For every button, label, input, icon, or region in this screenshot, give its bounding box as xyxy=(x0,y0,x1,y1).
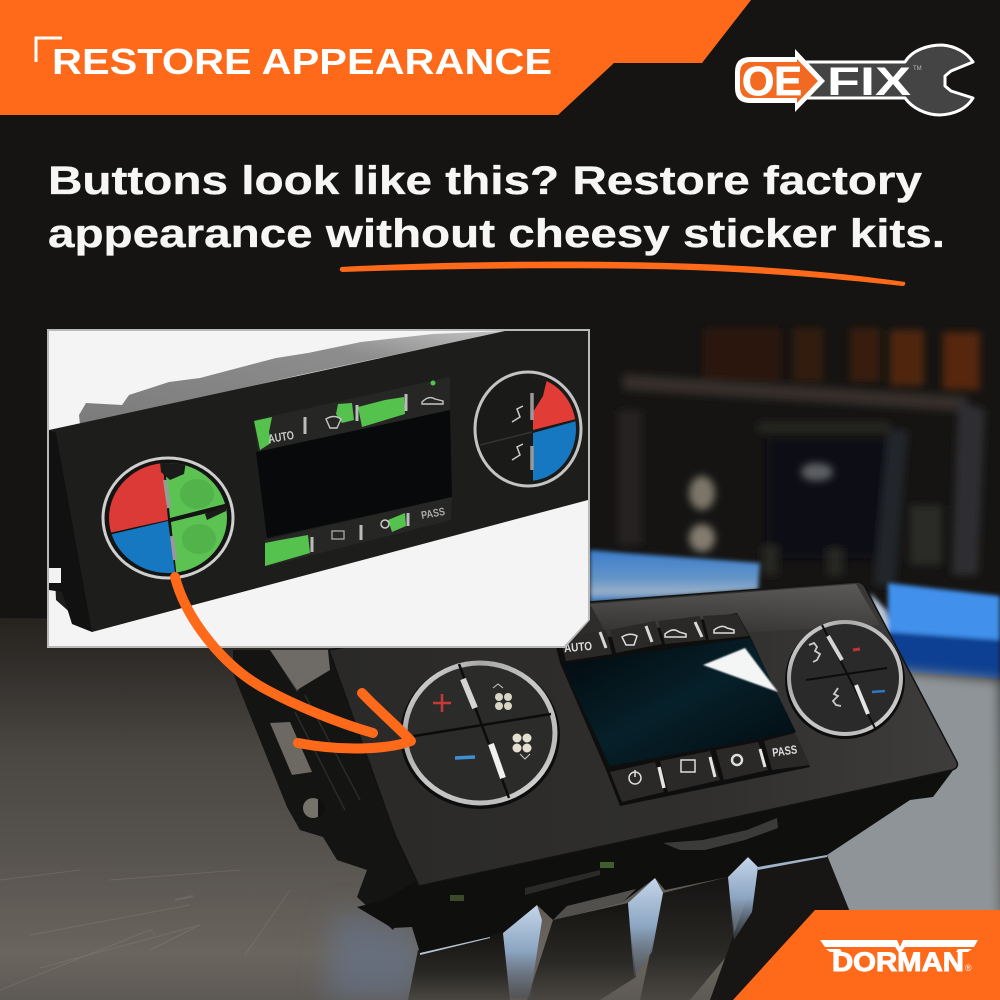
Dorman logo: DORMAN xyxy=(832,947,964,977)
table scratches xyxy=(0,870,290,990)
icon: fan up xyxy=(493,684,512,710)
Dorman logo: ® xyxy=(965,963,972,973)
faceplate side xyxy=(49,430,92,632)
arrow pill xyxy=(735,49,825,112)
worn left dial xyxy=(100,455,240,580)
label: AUTO: AUTO xyxy=(563,639,593,655)
label: PASS: PASS xyxy=(771,742,798,760)
banner heading: RESTORE APPEARANCE xyxy=(52,41,552,82)
display screen xyxy=(562,638,796,766)
wrench xyxy=(803,45,973,115)
inset display xyxy=(256,410,452,538)
label: PASS worn: PASS xyxy=(420,506,446,522)
trademark: TM xyxy=(913,66,922,72)
faceplate xyxy=(329,582,957,886)
arrow: from inset dial to real dial xyxy=(175,577,411,749)
bottom corner tab xyxy=(733,910,1000,1000)
blurred bulbs xyxy=(689,463,833,552)
blurred blue boxes xyxy=(590,550,1000,680)
worn right dial xyxy=(475,372,581,486)
blurred shelf and posts xyxy=(618,374,985,585)
green worn patches xyxy=(254,380,436,566)
main climate control unit photo xyxy=(233,582,957,955)
mounting bracket xyxy=(233,650,420,930)
screen glare xyxy=(703,648,778,692)
faceplate top sheen xyxy=(590,584,880,640)
worn button strip top xyxy=(254,377,450,452)
metal table xyxy=(0,618,1000,1000)
button surround xyxy=(556,613,810,806)
icon: fan down xyxy=(512,734,532,759)
corner bracket mark xyxy=(36,38,62,62)
bright table at right xyxy=(770,668,1000,1000)
headline xyxy=(48,159,945,256)
Dorman logo xyxy=(820,940,978,977)
worn button slits xyxy=(305,394,408,552)
blue table glare xyxy=(325,910,420,1000)
wordmark FIX: FIX xyxy=(827,60,911,104)
OE FIX logo xyxy=(735,45,973,115)
icon: minus xyxy=(455,757,475,758)
headline: appearance without cheesy sticker kits. xyxy=(48,212,945,256)
blurred orange shelf items xyxy=(703,328,980,390)
headline underline swoosh xyxy=(340,262,905,286)
top banner xyxy=(0,0,751,115)
bottom buttons xyxy=(610,733,810,802)
worn button strip bottom xyxy=(265,497,452,567)
headline: Buttons look like this? Restore factory xyxy=(48,159,923,203)
top buttons xyxy=(560,614,749,661)
icon: plus xyxy=(433,694,451,712)
right dial xyxy=(785,621,905,739)
wordmark OE: OE xyxy=(742,58,802,104)
button icons xyxy=(326,416,341,428)
table reflections under unit xyxy=(408,855,850,1000)
grey clips behind faceplate xyxy=(79,331,505,425)
label: AUTO worn: AUTO xyxy=(267,428,295,446)
left dial xyxy=(400,661,560,809)
inset photo: worn buttons xyxy=(47,329,590,648)
worn faceplate xyxy=(49,331,588,632)
unit underside with fins xyxy=(357,765,957,955)
